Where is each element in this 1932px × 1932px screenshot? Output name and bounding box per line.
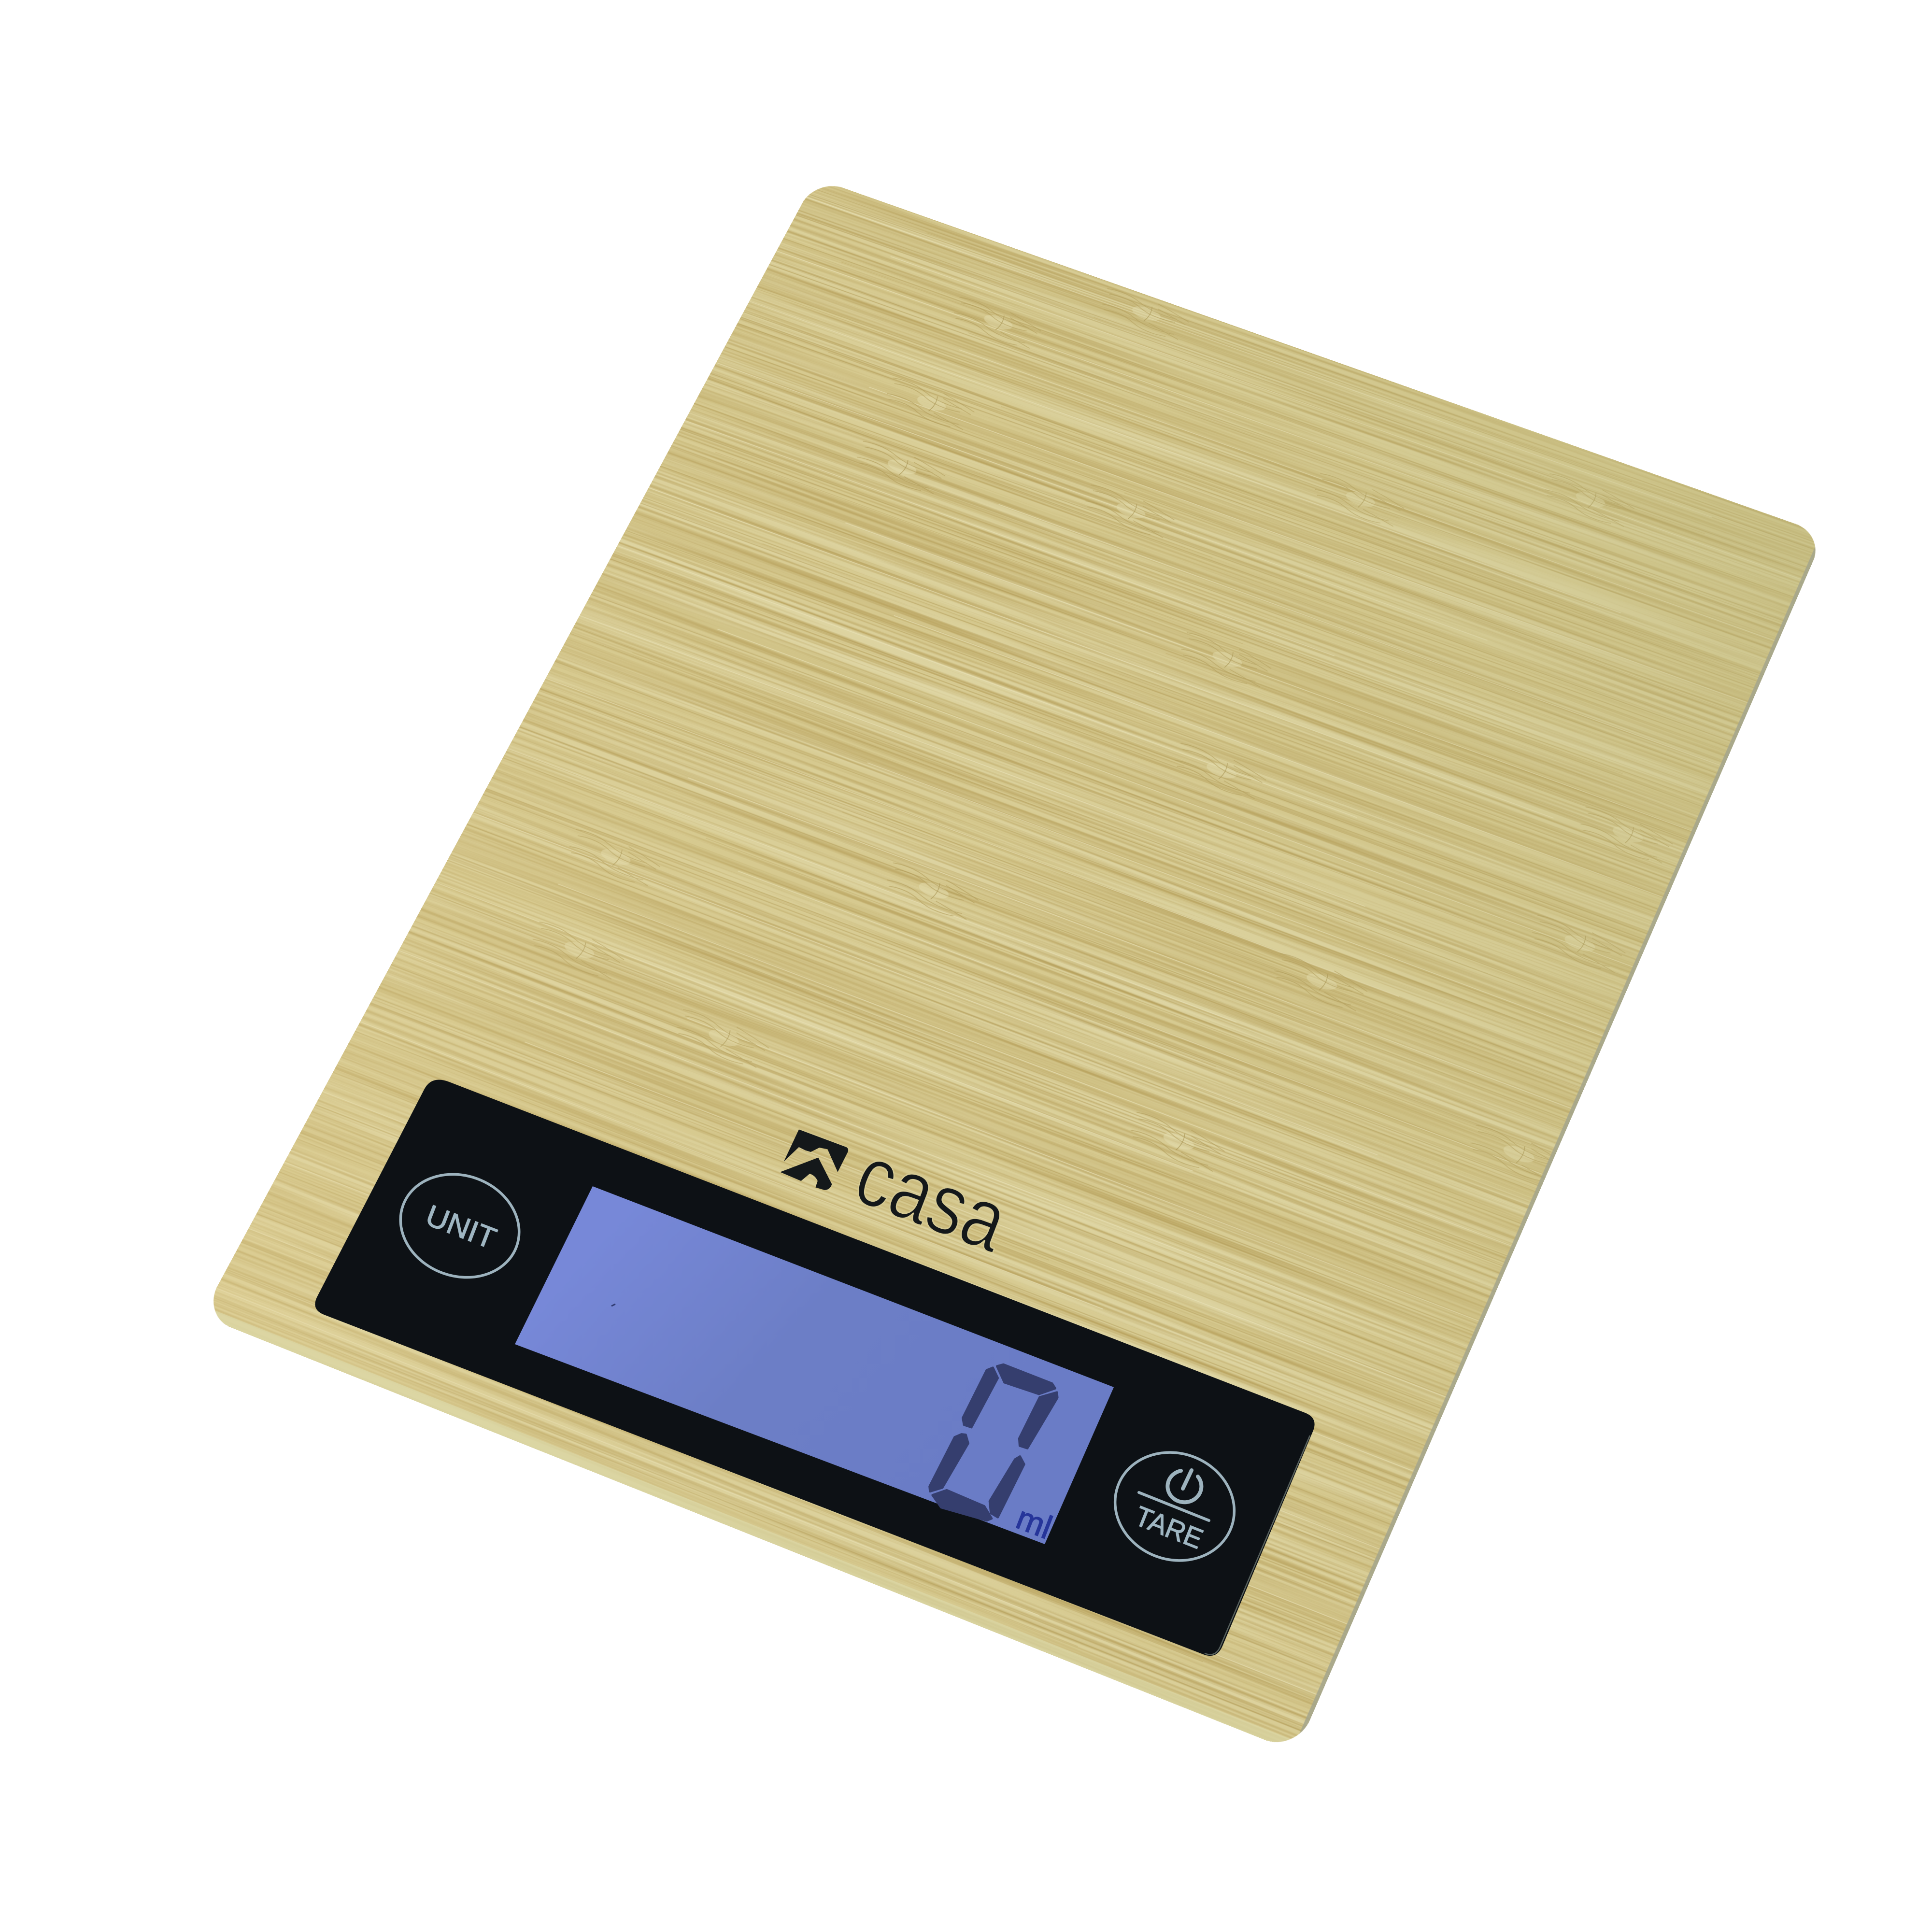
- LCD digit: 0: [929, 1364, 1057, 1520]
- button: power / TARE: TARE: [1131, 1500, 1208, 1555]
- button: UNIT: [386, 1158, 534, 1293]
- unit label: ml: ml: [1011, 1499, 1057, 1546]
- icon: power symbol: [1167, 1470, 1201, 1502]
- panel: black glass display panel: [315, 1080, 1315, 1656]
- LCD screen: [515, 1186, 1114, 1544]
- board: bamboo scale platform: [201, 178, 1825, 1752]
- logo: casa: [780, 1126, 1021, 1270]
- logo: casa: casa: [843, 1126, 1021, 1270]
- icon: house mark: [780, 1129, 848, 1190]
- button: UNIT: UNIT: [421, 1199, 501, 1256]
- button: power / TARE: [1100, 1436, 1250, 1577]
